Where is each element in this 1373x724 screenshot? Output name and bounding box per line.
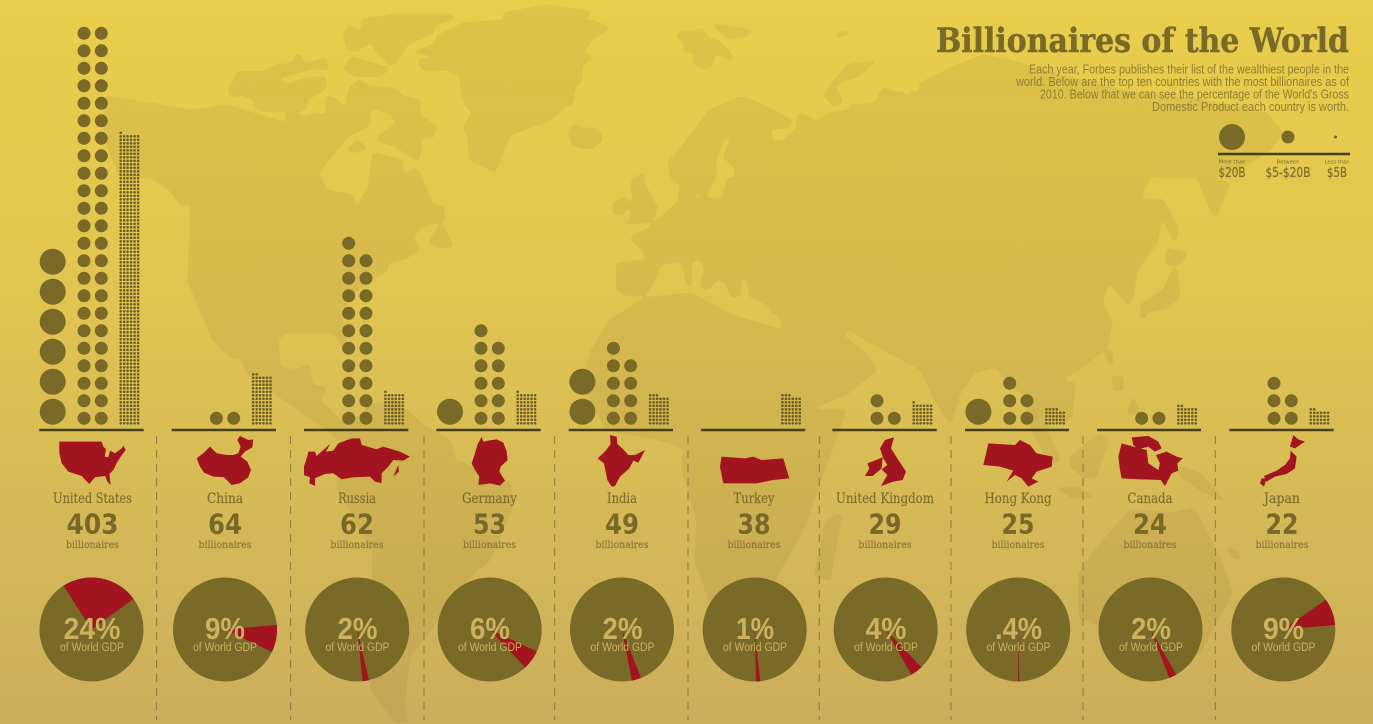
pie: 2% of World GDP: 2% (1131, 611, 1171, 646)
count: 64: 64 (208, 508, 242, 540)
pie: 2% of World GDP: 2% (602, 611, 642, 646)
map: Russia (304, 438, 410, 486)
pie: 6% of World GDP: 6% (470, 611, 510, 646)
map: Germany (472, 437, 508, 486)
panel: Hong Kong (965, 383, 1070, 682)
legend (1218, 124, 1350, 181)
dot columns: United States (39, 33, 144, 430)
panel: India (569, 348, 674, 682)
pie: 9% of World GDP: of World GDP (1252, 642, 1316, 654)
dot columns: Japan (1229, 383, 1334, 430)
panel: Canada (1097, 406, 1202, 682)
caption: billionaires (66, 539, 119, 551)
pie: 4% of World GDP (834, 578, 938, 682)
map: Canada (1118, 436, 1183, 486)
caption: billionaires (330, 539, 384, 551)
label: Germany: Germany (462, 491, 517, 507)
dot columns: India (569, 348, 673, 430)
pie: 9% of World GDP: of World GDP (193, 642, 257, 654)
panel: Turkey (701, 395, 807, 682)
pie: 1% of World GDP: 1% (736, 611, 774, 646)
pie: 9% of World GDP (173, 578, 277, 682)
label: India: India (607, 491, 637, 507)
map: India (598, 435, 645, 487)
legend: $20B (1218, 166, 1246, 181)
legend: $5B (1327, 166, 1347, 181)
map: United States (59, 442, 126, 485)
pie: 2% of World GDP: of World GDP (326, 642, 390, 654)
label: Canada: Canada (1128, 491, 1172, 507)
dot columns: Hong Kong (965, 383, 1069, 430)
map: Turkey (720, 457, 789, 483)
pie: 6% of World GDP (438, 578, 542, 682)
caption: billionaires (728, 539, 780, 551)
caption: billionaires (858, 539, 912, 551)
pie: 2% of World GDP (1098, 578, 1202, 682)
map: United Kingdom (865, 437, 906, 486)
pie: 2% of World GDP: of World GDP (1119, 642, 1183, 654)
label: United States: United States (53, 491, 132, 507)
legend: More than (1218, 160, 1246, 166)
map: Hong Kong (983, 440, 1053, 487)
map: China (197, 436, 253, 485)
count: 53: 53 (473, 508, 506, 540)
count: 24: 24 (1133, 508, 1167, 540)
dot columns: United Kingdom (832, 400, 937, 430)
pie: 2% of World GDP: of World GDP (590, 642, 655, 654)
dot columns: Germany (436, 330, 541, 430)
count: 403: 403 (66, 508, 118, 540)
pie: 9% of World GDP: 9% (1263, 611, 1304, 646)
pie: 24% of World GDP: 24% (64, 611, 120, 646)
caption: billionaires (1124, 539, 1176, 551)
label: China: China (207, 491, 243, 507)
label: United Kingdom: United Kingdom (836, 491, 934, 507)
pie: .4% of World GDP (966, 578, 1070, 682)
dot columns: Turkey (701, 395, 805, 430)
dot columns: China (172, 374, 276, 430)
panel: China (172, 374, 277, 682)
caption: billionaires (1256, 539, 1308, 551)
count: 22: 22 (1266, 508, 1298, 540)
count: 62: 62 (340, 508, 374, 540)
pie: 4% of World GDP: of World GDP (854, 642, 918, 654)
legend: Between (1276, 160, 1300, 166)
intro paragraph (1015, 62, 1349, 114)
pie: .4% of World GDP: .4% (995, 611, 1042, 646)
pie: 4% of World GDP: 4% (866, 611, 906, 646)
caption: billionaires (596, 539, 648, 551)
count: 29: 29 (868, 508, 902, 540)
pie: 2% of World GDP (305, 578, 409, 682)
count: 49: 49 (605, 508, 639, 540)
legend: Less than (1324, 160, 1350, 166)
pie: 24% of World GDP (40, 578, 144, 682)
panel: Russia (304, 243, 410, 682)
pie: 24% of World GDP: of World GDP (60, 642, 124, 654)
pie: 2% of World GDP: 2% (338, 611, 378, 646)
panel: United States (39, 33, 144, 682)
intro paragraph: Domestic Product each country is worth. (1152, 100, 1349, 114)
label: Hong Kong: Hong Kong (984, 491, 1052, 507)
dashed column separators (157, 436, 1215, 720)
pie: 9% of World GDP: 9% (205, 611, 245, 646)
caption: billionaires (198, 539, 252, 551)
label: Turkey: Turkey (734, 491, 775, 507)
label: Russia: Russia (338, 491, 376, 507)
pie: 6% of World GDP: of World GDP (458, 642, 522, 654)
label: Japan: Japan (1262, 491, 1300, 507)
legend: $5-$20B (1266, 166, 1310, 181)
caption: billionaires (992, 539, 1044, 551)
pie: 1% of World GDP: of World GDP (723, 642, 787, 654)
pie: .4% of World GDP: of World GDP (986, 642, 1051, 654)
panel: United Kingdom (832, 400, 938, 682)
pie: 2% of World GDP (570, 578, 674, 682)
pie: 9% of World GDP (1231, 578, 1335, 682)
dot columns: Russia (304, 243, 408, 430)
dot columns: Canada (1097, 406, 1201, 430)
caption: billionaires (463, 539, 516, 551)
count: 38: 38 (738, 508, 770, 540)
map: Japan (1260, 435, 1305, 487)
count: 25: 25 (1002, 508, 1034, 540)
pie: 1% of World GDP (703, 578, 807, 682)
panel: Germany (436, 330, 542, 682)
panel: Japan (1229, 383, 1335, 682)
